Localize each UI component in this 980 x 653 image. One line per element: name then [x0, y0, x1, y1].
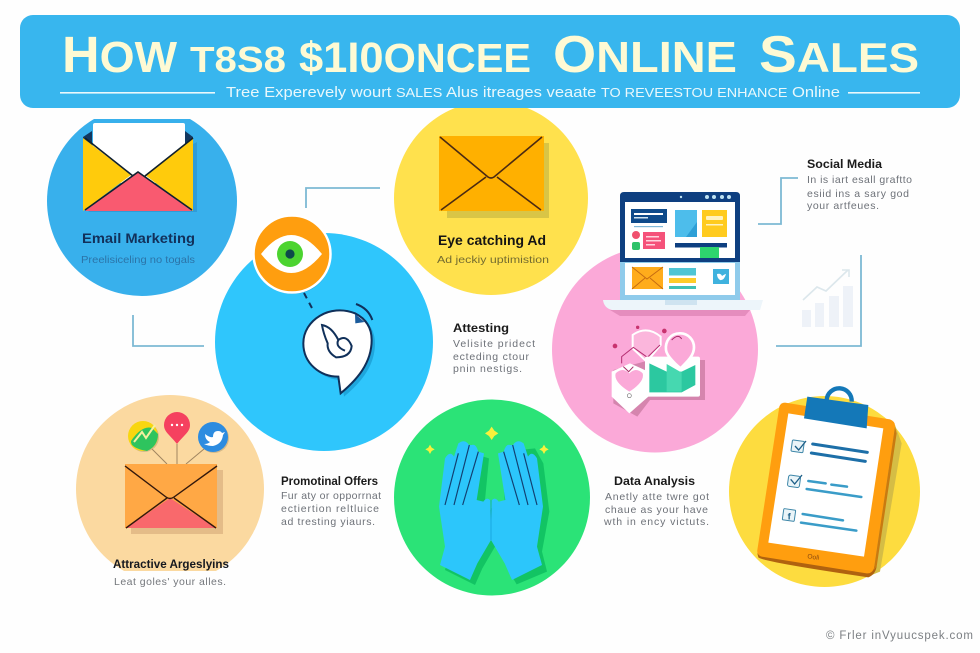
- title: SALES: [759, 26, 919, 84]
- body: data analysis: Anetly atte twre got: [605, 491, 709, 503]
- title: [62, 26, 919, 84]
- title: HOW: [62, 26, 177, 83]
- heading: data analysis: Data Analysis: [614, 476, 695, 488]
- body: promotional offers: [281, 490, 381, 528]
- panel: eye catching ad: [394, 101, 588, 295]
- body: data analysis: [603, 491, 709, 528]
- heading: attractive campaigns: Attractive Argeslyins: [113, 557, 229, 571]
- icon: eye badge: [254, 216, 331, 294]
- icon: orange envelope: [439, 136, 549, 218]
- icon: speech bubble: [303, 304, 375, 397]
- peach circle: [76, 395, 264, 583]
- body: attesting: [453, 338, 535, 375]
- yellow circle: [729, 396, 920, 587]
- email circle: [47, 106, 237, 296]
- icon: hearts and map: [612, 326, 705, 417]
- connector: top of centre circle: [306, 188, 380, 208]
- icon: praying gloves: [425, 427, 549, 585]
- header banner: [20, 15, 960, 108]
- subtitle: Tree Experevely wourt SALES Alus itreages veaate TO REVEESTOU ENHANCE Online: [226, 84, 840, 101]
- panel: yellow circle with clipboard: [729, 388, 920, 587]
- body: social media: esiid ins a sary god: [807, 188, 909, 200]
- body: promotional offers: Fur aty or opporrnat: [281, 490, 381, 502]
- body: attesting: Velisite pridect: [453, 338, 535, 350]
- panel: green circle with hands: [394, 400, 590, 596]
- body: attesting: pnin nestigs.: [453, 363, 522, 375]
- body: data analysis: wth in ency victuts.: [603, 516, 709, 528]
- body: social media: [807, 174, 912, 212]
- footer credit: © Frler inVyuucspek.com: [826, 630, 973, 642]
- heading: eye catching ad: Eye catching Ad: [438, 232, 546, 248]
- text block: promotional offers: [281, 476, 381, 528]
- body: promotional offers: ad tresting yiaurs.: [281, 516, 375, 528]
- title: T8S8: [190, 39, 286, 80]
- title: $1I0ONCEE: [299, 34, 531, 82]
- text: ad optimisation: Ad jeckiy uptimistion: [437, 254, 549, 266]
- icon: laptop: [603, 192, 763, 316]
- text block: attesting: [453, 323, 535, 375]
- chart: faded growth bars: [776, 255, 861, 346]
- icon: clipboard checklist: Ooli: [807, 553, 820, 562]
- dashed link: [304, 293, 313, 310]
- icon: clipboard checklist: [757, 388, 902, 577]
- icon: open envelope with letter: [83, 123, 197, 212]
- heading: promotional offers: Promotinal Offers: [281, 476, 378, 488]
- icon: envelope with social balloons: [125, 412, 229, 534]
- connector: email to centre circle: [133, 315, 204, 346]
- body: social media: your artfeues.: [807, 200, 879, 212]
- pink circle: [552, 246, 758, 452]
- body: data analysis: chaue as your have: [605, 504, 708, 516]
- panel: centre blue circle: [215, 216, 433, 451]
- banner background: [20, 15, 960, 108]
- blue circle: [215, 233, 433, 451]
- heading: social media: Social Media: [807, 159, 883, 171]
- green circle: [394, 400, 590, 596]
- yellow circle: [394, 101, 588, 295]
- panel: email marketing: [47, 106, 237, 296]
- body: social media: In is iart esall graftto: [807, 174, 912, 186]
- icon: clipboard checklist: f: [788, 511, 792, 521]
- panel: pink circle: [552, 192, 763, 452]
- text: attractive campaigns description: Leat goles' your alles.: [114, 576, 226, 588]
- heading: attesting: Attesting: [453, 323, 509, 335]
- body: promotional offers: ectiertion reltluice: [281, 503, 379, 515]
- body: attesting: ecteding ctour: [453, 351, 530, 363]
- heading: email marketing: Email Marketing: [82, 230, 195, 246]
- connector: social media: [758, 178, 798, 224]
- title: ONLINE: [553, 26, 737, 84]
- text block: social media: [807, 159, 912, 212]
- panel: attractive campaigns: [76, 395, 264, 588]
- text block: data analysis: [603, 476, 709, 528]
- text: email marketing description: Preelisiceling no togals: [81, 254, 195, 266]
